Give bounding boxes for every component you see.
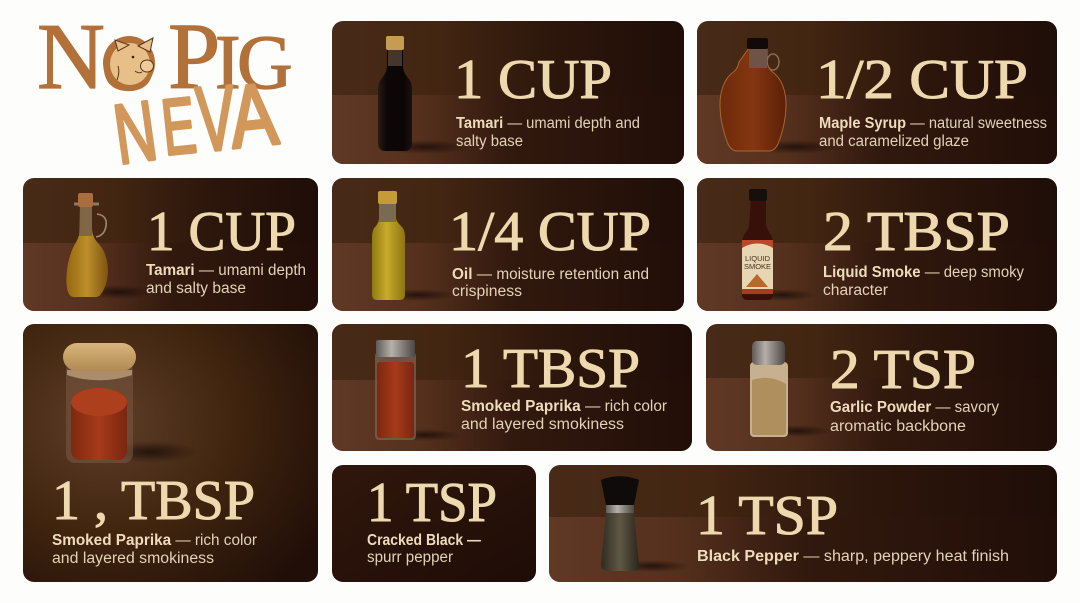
icon: liquid smoke bottle: SMOKE bbox=[744, 262, 771, 271]
description: Garlic Powder — savory bbox=[830, 399, 999, 416]
heading: 1 , TBSP: 1 , TBSP bbox=[52, 470, 255, 532]
card: 2 tbsp liquid smoke bbox=[697, 178, 1057, 311]
description: Liquid Smoke — deep smoky bbox=[823, 264, 1024, 281]
icon: olive oil bottle bbox=[372, 191, 405, 300]
heading: 1/2 CUP: 1/2 CUP bbox=[816, 49, 1028, 111]
description: and caramelized glaze bbox=[819, 133, 969, 150]
logo wordmark: Neva: A bbox=[225, 64, 282, 167]
card: 1/4 cup oil bbox=[332, 178, 684, 311]
description: Cracked Black — bbox=[367, 532, 481, 549]
description: salty base bbox=[456, 133, 523, 150]
heading: 1 TBSP: 1 TBSP bbox=[461, 338, 640, 400]
card: 2 tsp garlic powder bbox=[706, 324, 1057, 451]
logo: No Pig Neva bbox=[37, 5, 293, 183]
heading: 1/4 CUP: 1/4 CUP bbox=[449, 201, 651, 263]
description bbox=[823, 264, 1024, 299]
icon: oil cruet with cork bbox=[66, 193, 108, 297]
description: Tamari — umami depth bbox=[146, 262, 306, 279]
description bbox=[146, 262, 306, 297]
card: 1 tbsp smoked paprika large bbox=[23, 324, 318, 582]
description bbox=[830, 399, 999, 435]
description: Tamari — umami depth and bbox=[456, 115, 640, 132]
card: 1 tsp black pepper bbox=[549, 465, 1057, 582]
heading: 1 CUP: 1 CUP bbox=[454, 49, 612, 111]
card: 1/2 cup maple syrup bbox=[697, 21, 1057, 164]
description: spurr pepper bbox=[367, 549, 453, 566]
description: Maple Syrup — natural sweetness bbox=[819, 115, 1047, 132]
description: Black Pepper — sharp, peppery heat finish bbox=[697, 548, 1009, 565]
icon: paprika jar with wooden lid bbox=[63, 343, 136, 463]
description bbox=[456, 115, 640, 150]
icon: maple syrup bottle bbox=[720, 38, 786, 151]
icon: pig face inside the O bbox=[103, 36, 155, 90]
card: 1 tsp cracked black bbox=[332, 465, 536, 582]
description bbox=[52, 532, 257, 567]
description bbox=[452, 266, 649, 300]
logo wordmark: No Pig: G bbox=[237, 19, 293, 105]
heading: 1 CUP: 1 CUP bbox=[147, 201, 296, 263]
card: 1 cup tamari bbox=[332, 21, 684, 164]
heading: 2 TSP: 2 TSP bbox=[830, 339, 976, 401]
description: and salty base bbox=[146, 280, 246, 297]
description bbox=[819, 115, 1047, 150]
description bbox=[367, 532, 481, 566]
logo wordmark: No Pig: I bbox=[215, 19, 241, 105]
description: crispiness bbox=[452, 283, 522, 300]
heading: 1 TSP: 1 TSP bbox=[367, 472, 497, 534]
description: character bbox=[823, 282, 888, 299]
logo wordmark: No Pig: N bbox=[37, 5, 105, 109]
heading: 1 TSP: 1 TSP bbox=[696, 485, 838, 547]
description bbox=[461, 398, 667, 433]
logo wordmark: No Pig: O bbox=[101, 23, 156, 107]
description: and layered smokiness bbox=[461, 416, 624, 433]
logo wordmark: Neva bbox=[109, 64, 282, 183]
icon: dark tamari bottle bbox=[378, 36, 412, 151]
description: and layered smokiness bbox=[52, 550, 214, 567]
icon: garlic powder shaker bbox=[750, 341, 788, 437]
logo wordmark: Neva: V bbox=[193, 67, 238, 171]
logo wordmark: Neva: E bbox=[158, 81, 200, 173]
label text: LIQUID bbox=[745, 254, 771, 263]
description: Oil — moisture retention and bbox=[452, 266, 649, 283]
card: 1 tbsp smoked paprika bbox=[332, 324, 692, 451]
card: 1 cup tamari cruet bbox=[23, 178, 318, 311]
description: Smoked Paprika — rich color bbox=[52, 532, 257, 549]
icon: pepper grinder bbox=[601, 476, 639, 571]
icon: liquid smoke bottle bbox=[742, 189, 773, 300]
description: Smoked Paprika — rich color bbox=[461, 398, 667, 415]
logo wordmark: No Pig bbox=[37, 5, 293, 109]
logo wordmark: No Pig: P bbox=[168, 5, 220, 109]
description: aromatic backbone bbox=[830, 418, 966, 435]
icon: paprika spice shaker bbox=[375, 340, 416, 440]
logo wordmark: Neva: N bbox=[109, 84, 162, 183]
heading: 2 TBSP: 2 TBSP bbox=[823, 201, 1010, 263]
